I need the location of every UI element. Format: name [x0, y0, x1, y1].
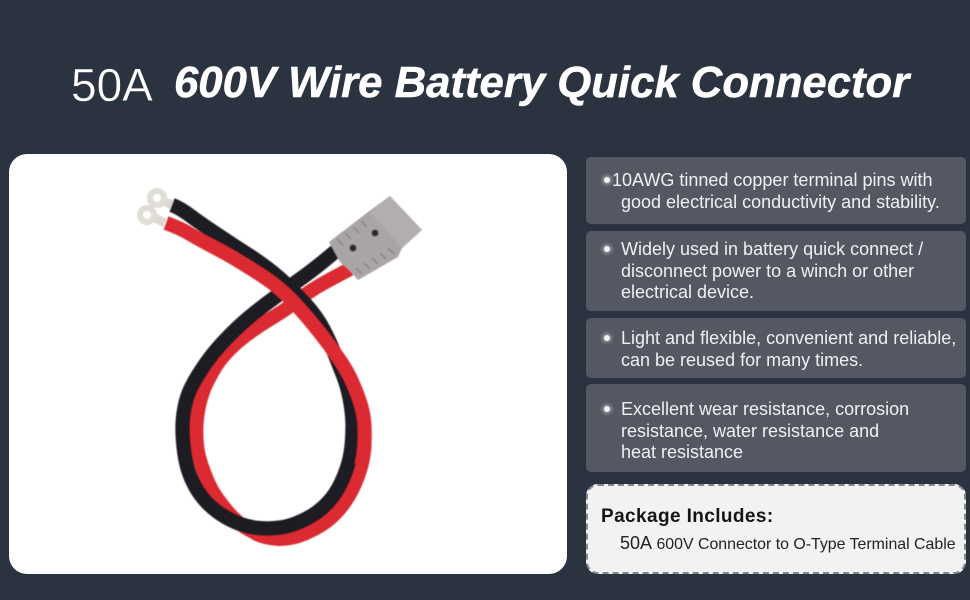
bullet	[604, 406, 610, 412]
panel: feature 2	[586, 231, 966, 311]
text: package content: 50A 600V Connector to O-Type Terminal Cable	[620, 533, 956, 553]
red wire top crossing	[166, 223, 365, 465]
panel: feature 1	[586, 157, 966, 224]
text: resistance: resistance, water resistance and	[621, 421, 879, 441]
bullet	[604, 177, 610, 183]
text: flexible	[621, 328, 956, 370]
panel: feature 4	[586, 384, 966, 472]
black wire	[172, 205, 353, 528]
text: resistance: Excellent wear resistance, corrosion	[621, 399, 909, 419]
bullet	[604, 335, 610, 341]
text: terminal pins	[612, 170, 940, 212]
text: terminal pins: good electrical conductivity and stability.	[621, 192, 940, 212]
text: flexible: can be reused for many times.	[621, 350, 863, 370]
text: usage: electrical device.	[621, 282, 754, 302]
red wire lower loop	[196, 269, 364, 539]
text: resistance: heat resistance	[621, 442, 743, 462]
text: resistance	[621, 399, 909, 462]
title: 50A	[71, 59, 153, 111]
title: 600V Wire Battery Quick Connector	[174, 58, 909, 107]
text: usage: Widely used in battery quick connect /	[621, 239, 923, 259]
text: terminal pins: 10AWG tinned copper terminal pins with	[612, 170, 932, 190]
panel: package includes	[586, 484, 966, 574]
text: usage	[621, 239, 924, 302]
bullet	[604, 246, 610, 252]
panel: product photo	[9, 154, 567, 574]
text: flexible: Light and flexible, convenient and reliable,	[621, 328, 956, 348]
panel: feature 3	[586, 318, 966, 378]
text: usage: disconnect power to a winch or other	[621, 261, 914, 281]
heading: package includes: Package Includes:	[601, 506, 774, 527]
icon: grey connector	[329, 196, 422, 280]
icon: ring terminals	[140, 191, 174, 223]
